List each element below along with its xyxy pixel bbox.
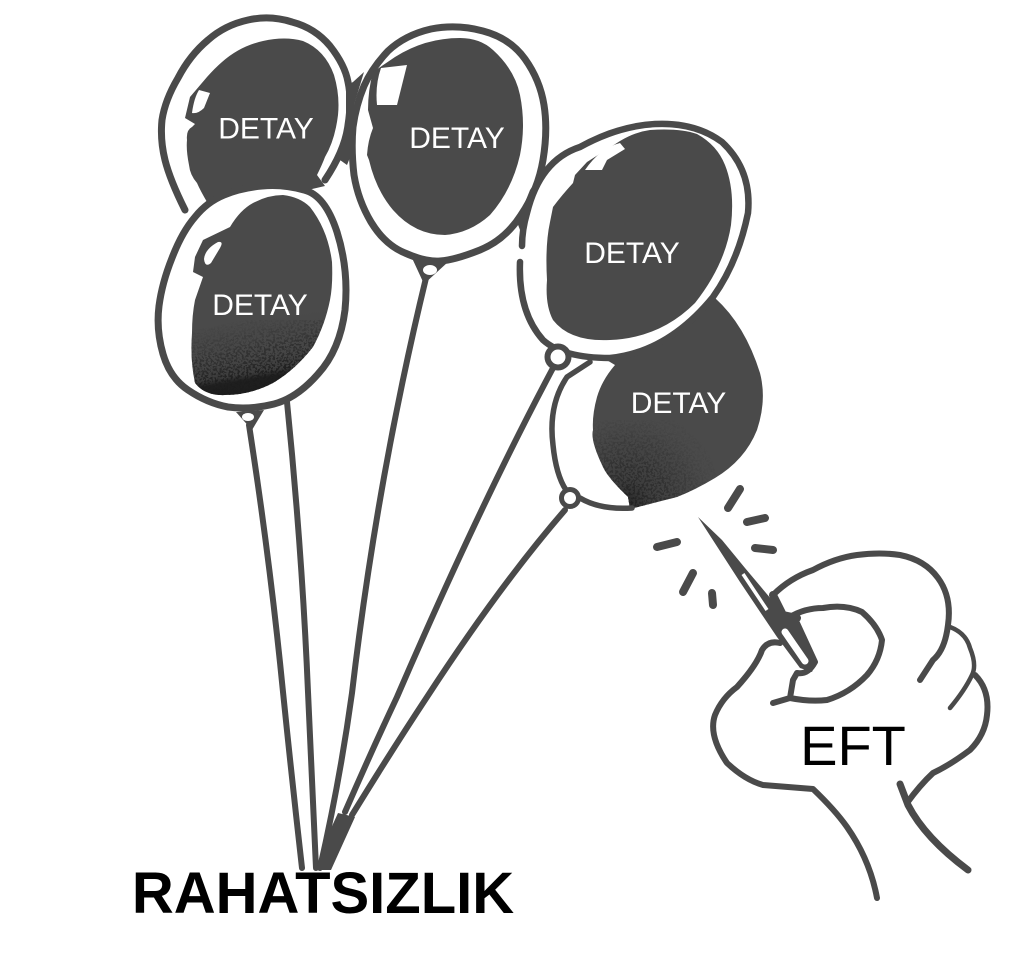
- label: DETAY: DETAY: [409, 122, 505, 155]
- hand with EFT label: [713, 554, 988, 898]
- label: DETAY: DETAY: [584, 237, 680, 270]
- needle: [698, 517, 817, 672]
- label: DETAY: DETAY: [212, 289, 308, 322]
- web: joins between top balloons: [340, 72, 364, 165]
- balloon infographic: [136, 14, 990, 914]
- pop spark marks: [657, 489, 773, 605]
- balloon: left lower: [158, 186, 346, 430]
- balloon: top middle: [352, 27, 546, 284]
- balloon: bottom right popping: [552, 298, 763, 510]
- balloon: top left: [161, 18, 350, 215]
- label: EFT: EFT: [800, 714, 906, 777]
- balloon: right: [520, 124, 748, 368]
- balloon strings: [249, 278, 565, 870]
- title: RAHATSIZLIK: RAHATSIZLIK: [132, 861, 514, 926]
- label: DETAY: DETAY: [631, 387, 726, 420]
- web: join between middle and right balloons: [517, 166, 546, 230]
- label: DETAY: DETAY: [218, 112, 314, 146]
